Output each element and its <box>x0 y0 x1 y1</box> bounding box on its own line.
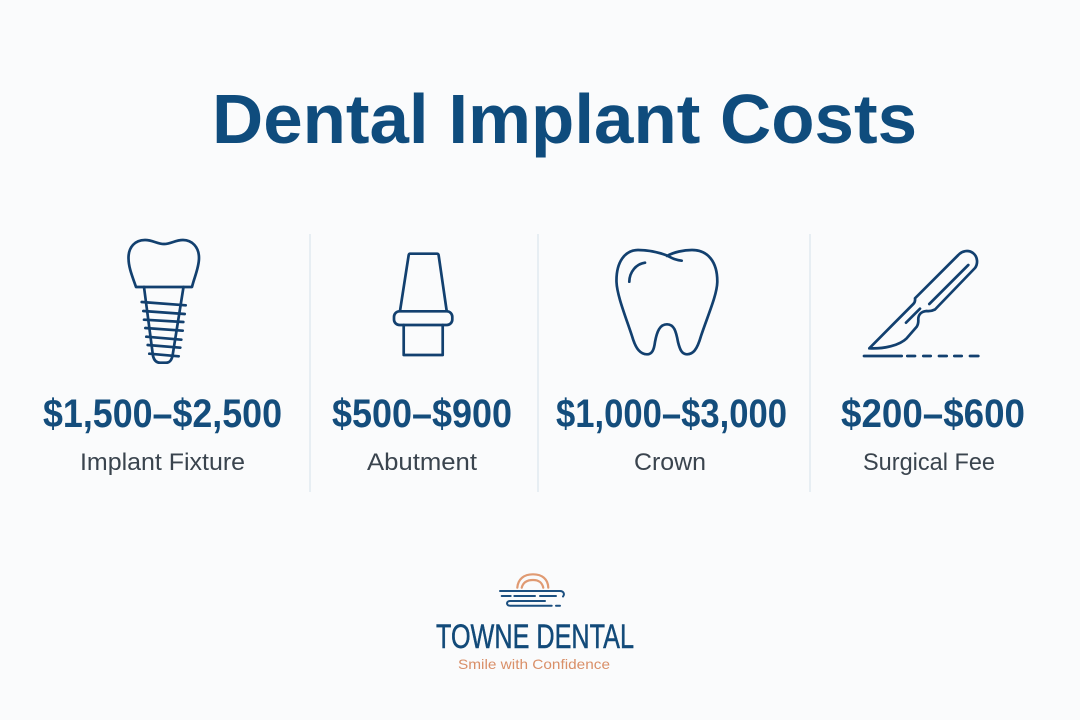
icon: implant <box>128 240 199 363</box>
panel: surgical fee <box>841 251 1025 476</box>
price: crown: $1,000–$3,000 <box>556 392 787 436</box>
icon: sun over water <box>500 574 564 606</box>
panel: implant fixture <box>43 240 282 476</box>
price: abutment: $500–$900 <box>332 392 512 436</box>
price: implant fixture: $1,500–$2,500 <box>43 392 282 436</box>
label: crown: Crown <box>634 449 706 476</box>
title: Dental Implant Costs <box>212 80 917 158</box>
panel: abutment <box>332 254 512 476</box>
icon: scalpel <box>864 251 978 356</box>
label: surgical fee: Surgical Fee <box>863 449 995 476</box>
tagline: Smile with Confidence <box>458 656 610 672</box>
price: surgical fee: $200–$600 <box>841 392 1025 436</box>
label: implant fixture: Implant Fixture <box>80 449 245 476</box>
brand name: TOWNE DENTAL <box>436 618 634 656</box>
logo: Towne Dental <box>436 574 634 672</box>
panel: crown <box>556 250 787 476</box>
label: abutment: Abutment <box>367 449 477 476</box>
icon: tooth <box>616 250 717 354</box>
icon: abutment <box>394 254 452 355</box>
